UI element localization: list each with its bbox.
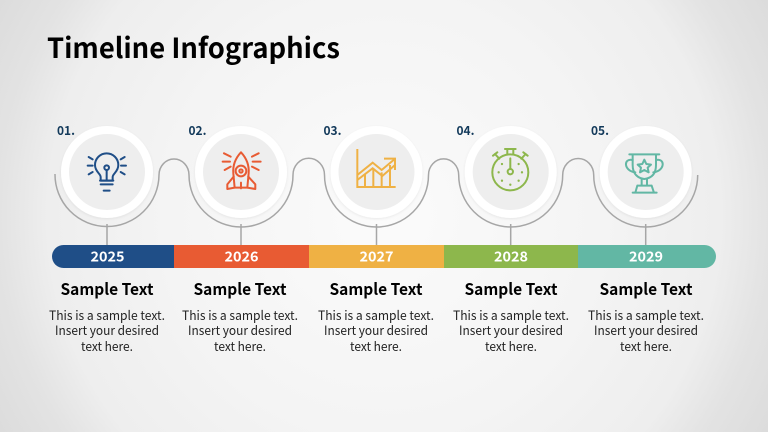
icon: trophy [626, 154, 663, 193]
icon: stopwatch [492, 149, 528, 190]
segment 2029 [578, 245, 716, 268]
segment 2025 [52, 245, 174, 268]
column 4 text: This is a sample text. [453, 305, 569, 324]
segment 2028 [444, 245, 578, 268]
column 5 text: Insert your desired [594, 320, 698, 339]
column 1 text: This is a sample text. [49, 305, 165, 324]
column 3 text: Insert your desired [324, 320, 428, 339]
year bar [52, 245, 716, 268]
column 5 text: Sample Text [600, 276, 693, 300]
step numbers: 04. [456, 120, 474, 139]
column 5 text [588, 276, 704, 355]
year labels: 2025 [90, 246, 124, 266]
column 1 text: Insert your desired [55, 320, 159, 339]
circle 4 [465, 126, 557, 218]
column 4 text: text here. [485, 336, 537, 355]
circle 5 [600, 126, 692, 218]
column 3 text: text here. [350, 336, 402, 355]
column 3 text: Sample Text [330, 276, 423, 300]
segment 2026 [174, 245, 309, 268]
icon: light bulb [88, 153, 126, 191]
column 4 text: Sample Text [464, 276, 558, 300]
stems [107, 224, 646, 245]
column 2 text [182, 276, 298, 355]
circle 1 [61, 126, 153, 218]
column 4 text [453, 276, 569, 355]
icon: growth chart [357, 149, 396, 187]
year labels: 2028 [494, 246, 528, 266]
step numbers: 03. [324, 120, 342, 139]
segment 2027 [309, 245, 444, 268]
step numbers: 05. [591, 120, 609, 139]
circle 2 [195, 126, 287, 218]
column 1 text: Sample Text [60, 276, 154, 300]
column 1 text: text here. [81, 336, 133, 355]
circle 3 [330, 126, 422, 218]
column 1 text [49, 276, 165, 355]
year labels [90, 246, 663, 266]
connector curve [55, 158, 698, 227]
column 5 text: This is a sample text. [588, 305, 704, 324]
year labels: 2026 [224, 246, 258, 266]
column 2 text: This is a sample text. [182, 305, 298, 324]
title: Timeline Infographics [47, 27, 340, 67]
column 2 text: Insert your desired [188, 320, 292, 339]
column 5 text: text here. [620, 336, 672, 355]
step numbers [57, 120, 609, 139]
year labels: 2027 [360, 246, 394, 266]
step numbers: 01. [57, 120, 75, 139]
column 3 text: This is a sample text. [318, 305, 434, 324]
column 4 text: Insert your desired [459, 320, 563, 339]
column 3 text [318, 276, 434, 355]
column 2 text: text here. [214, 336, 266, 355]
year labels: 2029 [629, 246, 663, 266]
column 2 text: Sample Text [194, 276, 287, 300]
step numbers: 02. [188, 120, 206, 139]
icon: rocket [223, 152, 261, 189]
